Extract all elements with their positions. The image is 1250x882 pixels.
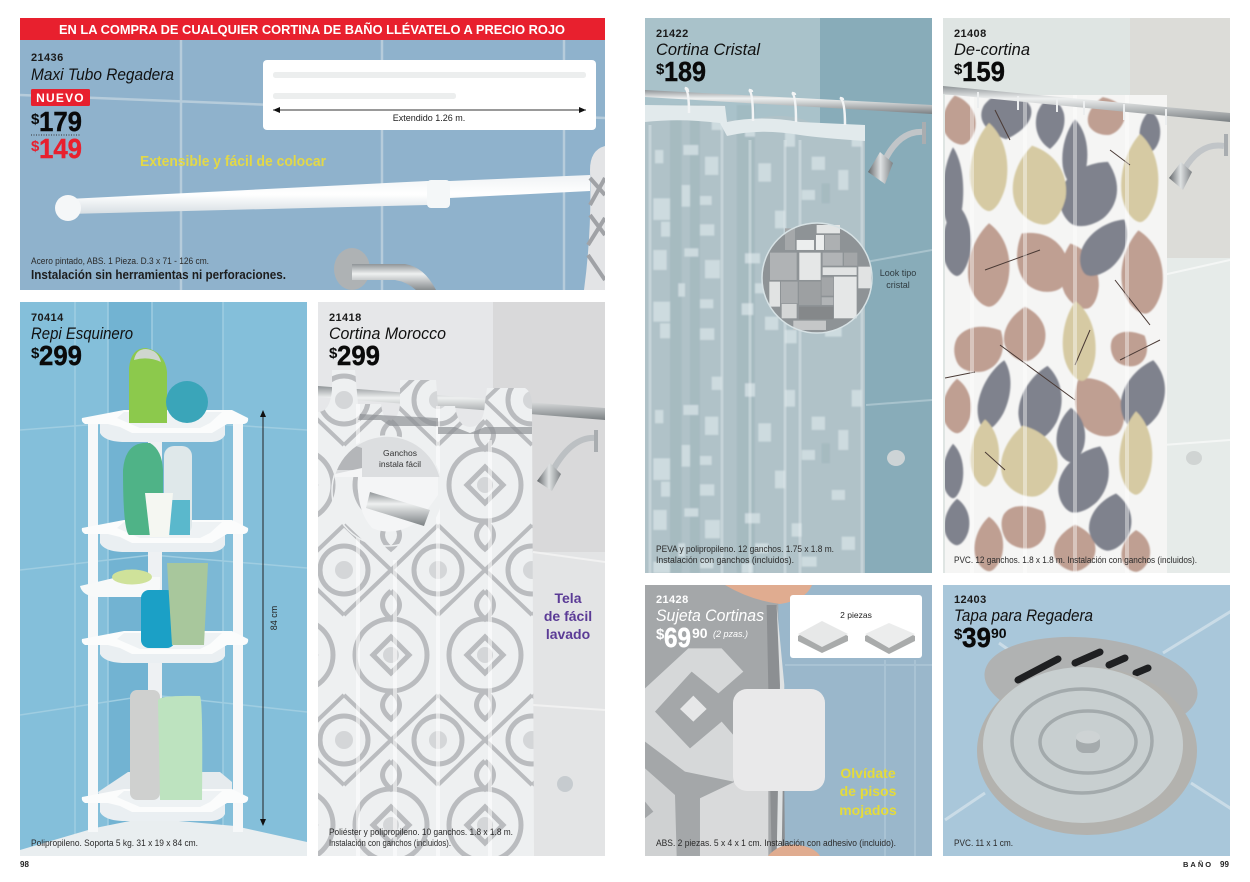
- shower head: [1169, 134, 1228, 190]
- specs text: Instalación con ganchos (incluidos).: [329, 838, 451, 848]
- inset: rod extended: Extendido 1.26 m.: [393, 113, 465, 123]
- price: 189: [664, 56, 706, 87]
- curtain rod: [318, 386, 605, 420]
- specs text: Instalación sin herramientas ni perforaciones.: [31, 268, 286, 282]
- price: $: [656, 626, 665, 643]
- product code and title: Tapa para Regadera: [954, 606, 1093, 625]
- curtain rod: [943, 86, 1230, 122]
- product code and title: 70414: [31, 312, 64, 324]
- metal drain: [980, 627, 1202, 741]
- corner shelf unit: [80, 410, 248, 832]
- specs text: PEVA y polipropileno. 12 ganchos. 1.75 x 1.8 m.: [656, 544, 834, 554]
- specs text: PVC. 11 x 1 cm.: [954, 838, 1013, 848]
- purple claim: [544, 590, 592, 642]
- yellow claim: Olvídate: [840, 765, 896, 781]
- product code and title: Repi Esquinero: [31, 324, 133, 343]
- inset caption: [880, 268, 916, 290]
- inset: easy hooks: [332, 436, 442, 547]
- panel: Tapa para Regadera: [943, 585, 1230, 856]
- inset: two pieces: 2 piezas: [840, 610, 872, 620]
- purple claim: Tela: [555, 590, 582, 606]
- curtain folds and hem: [358, 404, 532, 856]
- panel: Sujeta Cortinas: [645, 585, 932, 856]
- product code and title: [954, 28, 1030, 59]
- bottles on shelves: [112, 348, 208, 800]
- price: regular: $: [31, 111, 40, 128]
- product code and title: De-cortina: [954, 40, 1030, 59]
- fingers: [725, 585, 820, 856]
- product code and title: [31, 312, 133, 343]
- specs text: [329, 827, 513, 848]
- product code and title: [656, 28, 761, 59]
- yellow claim: mojados: [839, 802, 897, 818]
- price: [954, 622, 1007, 653]
- price: [656, 622, 748, 653]
- yellow claim: Extensible y fácil de colocar: [140, 154, 326, 170]
- price: $: [954, 61, 963, 78]
- product code and title: Cortina Cristal: [656, 40, 761, 59]
- panel: Repi Esquinero: [20, 302, 307, 856]
- product code and title: Sujeta Cortinas: [656, 606, 764, 625]
- inset: two pieces: [790, 595, 922, 658]
- price: $: [656, 61, 665, 78]
- curtain: [318, 370, 534, 856]
- product code and title: 12403: [954, 594, 987, 606]
- product code and title: Cortina Morocco: [329, 324, 446, 343]
- section and page number right: 99: [1220, 860, 1229, 869]
- page number left: 98: [20, 860, 29, 869]
- price: 90: [692, 625, 708, 641]
- white clip: [733, 689, 825, 791]
- inset: easy hooks: instala fácil: [379, 459, 421, 469]
- specs text: Polipropileno. Soporta 5 kg. 31 x 19 x 84 cm.: [31, 838, 198, 848]
- shower head: [537, 430, 598, 491]
- inset: easy hooks: Ganchos: [383, 448, 417, 458]
- price: $: [954, 626, 963, 643]
- price: 299: [337, 340, 380, 371]
- inset caption: Look tipo: [880, 268, 916, 278]
- price: offer: 149: [39, 133, 82, 164]
- panel: Cortina Cristal: [645, 18, 932, 573]
- wall fixture: [557, 776, 573, 792]
- product code and title: 21428: [656, 594, 689, 606]
- tension rod: [55, 175, 590, 221]
- hooks: [978, 92, 1166, 125]
- shower head: [868, 122, 926, 184]
- price: (2 pzas.): [713, 629, 748, 639]
- specs text: [656, 544, 834, 565]
- panel: Cortina Morocco: [318, 302, 605, 856]
- price: regular: 179: [39, 106, 82, 137]
- price: 159: [962, 56, 1005, 87]
- dimension arrow: 84 cm: [269, 606, 279, 630]
- dimension arrow: [260, 410, 279, 826]
- price: 39: [962, 622, 991, 653]
- product code and title: Maxi Tubo Regadera: [31, 65, 174, 84]
- yellow claim: de pisos: [840, 783, 897, 799]
- badge: nuevo: NUEVO: [36, 91, 85, 105]
- product code and title: 21418: [329, 312, 362, 324]
- product code and title: 21436: [31, 52, 64, 64]
- inset: crystal pattern: [762, 223, 872, 333]
- product code and title: [656, 594, 764, 625]
- crystal curtain: [645, 105, 865, 573]
- product code and title: 21422: [656, 28, 689, 40]
- section and page number right: [1183, 860, 1229, 869]
- banner: red promo: EN LA COMPRA DE CUALQUIER CORTINA DE BAÑO LLÉVATELO A PRECIO ROJO: [59, 22, 565, 37]
- price: $: [329, 345, 338, 362]
- curtain rod: [645, 90, 932, 114]
- leaf curtain: [945, 95, 1167, 573]
- product code and title: [329, 312, 446, 343]
- faucet: [334, 248, 437, 292]
- product code and title: [954, 594, 1093, 625]
- product code and title: 21408: [954, 28, 987, 40]
- yellow claim: [839, 765, 897, 818]
- product code and title: [31, 52, 174, 84]
- grey curtain fabric: [645, 585, 785, 856]
- specs text: Poliéster y polipropileno. 10 ganchos. 1.8 x 1.8 m.: [329, 827, 513, 837]
- specs text: Acero pintado, ABS. 1 Pieza. D.3 x 71 - 126 cm.: [31, 256, 209, 266]
- price: offer: $: [31, 138, 40, 155]
- purple claim: de fácil: [544, 608, 592, 624]
- rubber cover: [977, 667, 1197, 835]
- inset caption: cristal: [886, 280, 910, 290]
- banner: red promo: [20, 18, 605, 40]
- badge: nuevo: [31, 89, 90, 106]
- panel: De-cortina: [943, 18, 1230, 573]
- specs text: [31, 256, 286, 282]
- folded curtain edge: [584, 146, 605, 290]
- section and page number right: BAÑO: [1183, 860, 1213, 869]
- price: 90: [991, 625, 1007, 641]
- purple claim: lavado: [546, 626, 590, 642]
- inset: rod extended: [263, 60, 596, 130]
- hooks: [685, 88, 845, 125]
- panel: Maxi Tubo Regadera: [20, 18, 605, 290]
- price: 299: [39, 340, 82, 371]
- price: $: [31, 345, 40, 362]
- specs text: Instalación con ganchos (incluidos).: [656, 555, 794, 565]
- specs text: PVC. 12 ganchos. 1.8 x 1.8 m. Instalación con ganchos (incluidos).: [954, 555, 1197, 565]
- specs text: ABS. 2 piezas. 5 x 4 x 1 cm. Instalación con adhesivo (incluido).: [656, 838, 896, 848]
- price: 69: [664, 622, 691, 653]
- wall fixture: [887, 450, 905, 466]
- wall fixture: [1186, 451, 1202, 465]
